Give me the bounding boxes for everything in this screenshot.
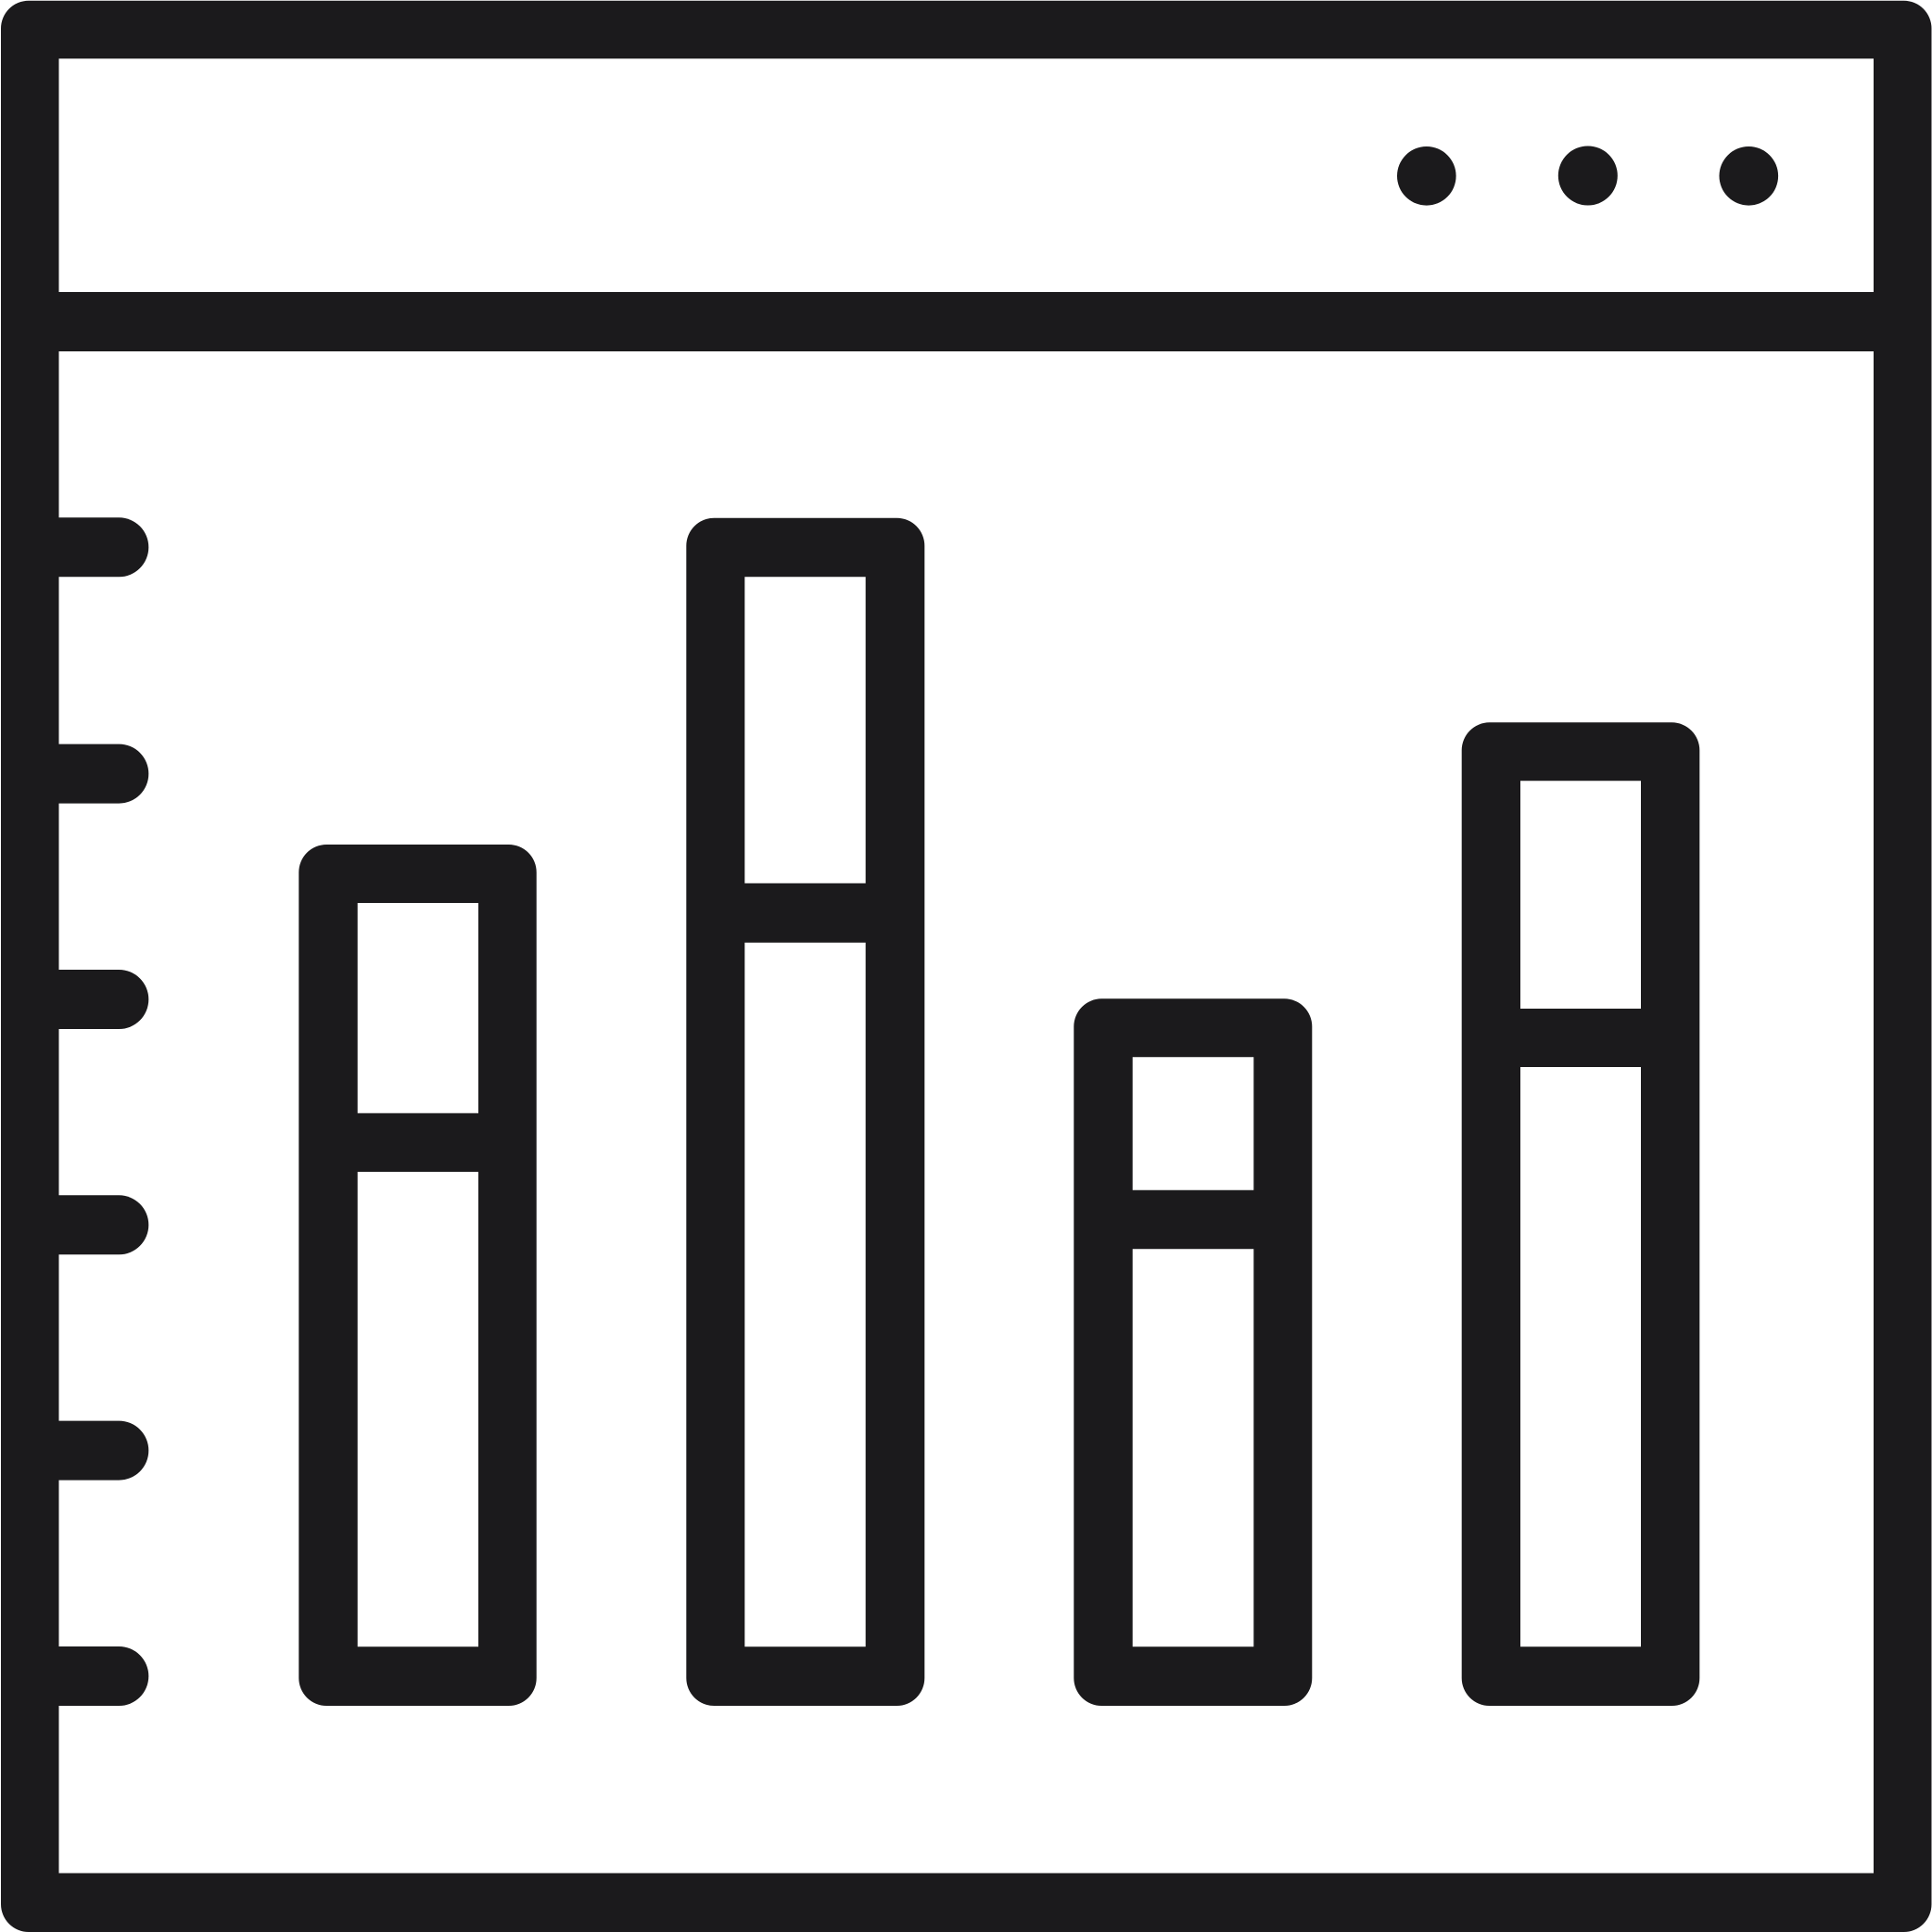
y-axis tick marks	[56, 517, 148, 1706]
bar 3	[1074, 998, 1312, 1706]
bar 2	[686, 518, 924, 1706]
bar 1	[299, 845, 537, 1706]
bar 4	[1462, 722, 1699, 1706]
window control dots	[1397, 146, 1778, 206]
